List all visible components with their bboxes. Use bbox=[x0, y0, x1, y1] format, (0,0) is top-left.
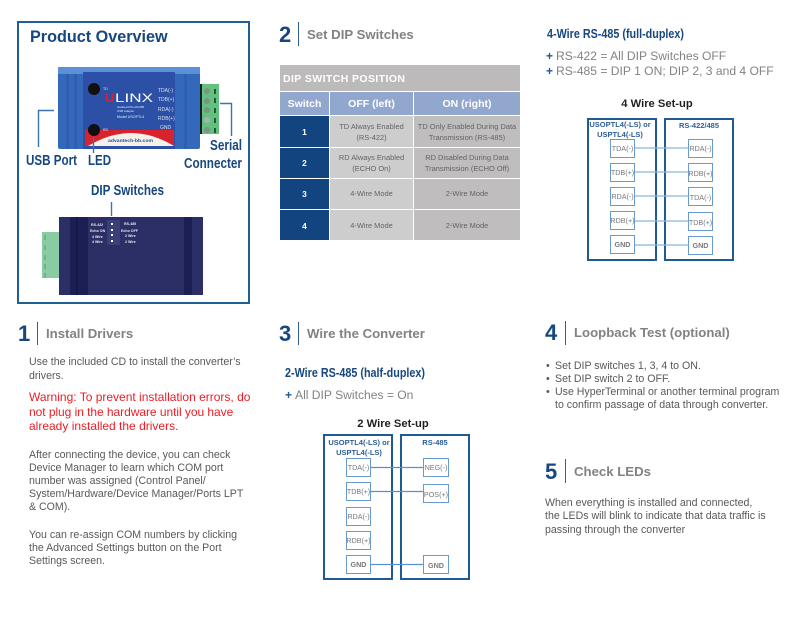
heading: loopback test: Loopback Test (optional) bbox=[574, 325, 730, 340]
table: dip switch position: 3 bbox=[302, 189, 307, 199]
heading: product overview: Product Overview bbox=[30, 28, 168, 46]
diagram: 4 wire set-up: USPTL4(-LS) bbox=[597, 130, 643, 139]
table: dip switch position: 2-Wire Mode bbox=[446, 221, 488, 230]
step number 5: 5 bbox=[545, 459, 557, 484]
section 3: wire the converter bbox=[279, 321, 469, 579]
callout: dip switches bbox=[91, 183, 164, 216]
list: loopback steps: • bbox=[546, 360, 550, 372]
image: converter bottom view: RS-422 bbox=[91, 223, 103, 227]
table: dip switch position: 1 bbox=[302, 127, 307, 137]
image: converter top view: RDB(+) bbox=[158, 116, 175, 122]
heading: check leds: Check LEDs bbox=[574, 464, 651, 479]
list: loopback steps: • bbox=[546, 386, 550, 398]
table: dip switch position: 2 bbox=[302, 158, 307, 168]
image: converter bottom view: RS-485 bbox=[124, 222, 136, 226]
section 4: loopback test bbox=[545, 320, 779, 411]
table: dip switch position: (ECHO On) bbox=[352, 164, 391, 173]
callout: usb port bbox=[26, 110, 77, 169]
image: converter bottom view: Echo OFF bbox=[121, 229, 139, 233]
table: dip switch position: DIP SWITCH POSITION bbox=[283, 73, 405, 85]
table: dip switch position: 4-Wire Mode bbox=[350, 221, 393, 230]
image: converter top view: RDA(-) bbox=[158, 107, 174, 113]
image: converter top view: GND bbox=[160, 125, 172, 131]
diagram: 4 wire set-up: RDB(+) bbox=[688, 169, 713, 178]
image: converter top view: USB Adapter bbox=[117, 109, 134, 113]
diagram: 4 wire set-up: RS-422/485 bbox=[679, 121, 719, 130]
diagram: 4 wire set-up: TDB(+) bbox=[611, 168, 634, 177]
diagram: 4 wire set-up: RDA(-) bbox=[689, 144, 712, 153]
diagram: 2 wire set-up: TDB(+) bbox=[347, 487, 370, 496]
callout: led: LED bbox=[88, 153, 111, 169]
image: converter top view: RD bbox=[103, 128, 109, 132]
table: dip switch position: RD Disabled During Data bbox=[425, 153, 510, 162]
section 5: check leds bbox=[545, 459, 766, 536]
text: led description: the LEDs will blink to indicate that data traffic is bbox=[545, 510, 766, 522]
heading: wire the converter: Wire the Converter bbox=[307, 326, 425, 341]
list: loopback steps: to confirm passage of data through converter. bbox=[555, 399, 768, 411]
diagram: 2 wire set-up: USOPTL4(-LS) or bbox=[328, 438, 390, 447]
heading: 4-wire rs-485: 4-Wire RS-485 (full-duplex) bbox=[547, 26, 684, 41]
diagram: 2 wire set-up: TDA(-) bbox=[348, 463, 369, 472]
diagram: 4 wire set-up: USOPTL4(-LS) or bbox=[589, 120, 651, 129]
image: converter top view bbox=[58, 67, 219, 149]
diagram: 2 wire set-up: RS-485 bbox=[422, 438, 448, 447]
section: 4-wire rs-485 bbox=[546, 26, 774, 260]
diagram: 4 wire set-up: TDA(-) bbox=[612, 144, 633, 153]
table: dip switch position: ON (right) bbox=[442, 98, 492, 110]
table: dip switch position: 2-Wire Mode bbox=[446, 189, 488, 198]
text: rs-485 note: RS-485 = DIP 1 ON; DIP 2, 3 and 4 OFF bbox=[556, 64, 774, 78]
text: all dip switches on: All DIP Switches = On bbox=[295, 388, 413, 402]
diagram: 2 wire set-up bbox=[324, 418, 469, 579]
list: loopback steps: Set DIP switches 1, 3, 4 to ON. bbox=[555, 360, 701, 372]
image: converter bottom view: 4 Wire bbox=[92, 240, 103, 244]
text: device manager: Device Manager to learn which COM port bbox=[29, 462, 223, 474]
image: converter top view: TD bbox=[103, 87, 108, 91]
panel: product overview bbox=[18, 22, 249, 303]
table: dip switch position: TD Only Enabled During Data bbox=[418, 122, 517, 131]
diagram: 4 wire set-up: RDA(-) bbox=[611, 192, 634, 201]
text: re-assign: You can re-assign COM numbers by clicking bbox=[29, 529, 237, 541]
list: loopback steps: Use HyperTerminal or another terminal program bbox=[555, 386, 779, 398]
text: led description: When everything is installed and connected, bbox=[545, 497, 752, 509]
table: dip switch position: Transmission (RS-485) bbox=[429, 133, 506, 142]
image: converter bottom view: 2 Wire bbox=[125, 240, 136, 244]
step number 4: 4 bbox=[545, 320, 558, 345]
image: converter bottom view bbox=[42, 217, 203, 295]
text: warning: Warning: To prevent installation errors, do bbox=[29, 390, 251, 404]
table: dip switch position: RD Always Enabled bbox=[339, 153, 404, 162]
image: converter top view: advantech-bb.com bbox=[108, 138, 153, 144]
diagram: 2 wire set-up: 2 Wire Set-up bbox=[357, 418, 429, 430]
diagram: 4 wire set-up: GND bbox=[615, 240, 630, 249]
diagram: 2 wire set-up: USPTL4(-LS) bbox=[336, 448, 382, 457]
diagram: 2 wire set-up: RDB(+) bbox=[346, 536, 371, 545]
callout: dip switches: DIP Switches bbox=[91, 183, 164, 199]
image: converter top view: LINX bbox=[115, 91, 153, 105]
diagram: 4 wire set-up: TDB(+) bbox=[689, 218, 712, 227]
table: dip switch position: OFF (left) bbox=[348, 98, 395, 110]
heading: set dip switches: Set DIP Switches bbox=[307, 27, 414, 42]
text: intro: Use the included CD to install the converter’s bbox=[29, 356, 241, 368]
text: rs-422 note: + bbox=[546, 49, 553, 63]
text: device manager: & COM). bbox=[29, 501, 70, 513]
diagram: 2 wire set-up: POS(+) bbox=[424, 490, 448, 499]
text: warning: not plug in the hardware until you have bbox=[29, 405, 234, 419]
text: rs-422 note: RS-422 = All DIP Switches OFF bbox=[556, 49, 726, 63]
diagram: 2 wire set-up: GND bbox=[351, 560, 366, 569]
list: loopback steps: • bbox=[546, 373, 550, 385]
text: device manager: System/Hardware/Device Manager/Ports LPT bbox=[29, 488, 244, 500]
diagram: 4 wire set-up: 4 Wire Set-up bbox=[621, 98, 693, 110]
text: rs-485 note: + bbox=[546, 64, 553, 78]
image: converter bottom view: Echo ON bbox=[90, 229, 106, 233]
image: converter top view: Isolated RS-x22/485 bbox=[117, 105, 145, 109]
text: device manager: After connecting the device, you can check bbox=[29, 449, 231, 461]
step number 3: 3 bbox=[279, 321, 291, 346]
diagram: 2 wire set-up: GND bbox=[428, 561, 444, 570]
image: converter top view: U bbox=[105, 90, 114, 105]
table: dip switch position: (RS-422) bbox=[356, 133, 387, 142]
table: dip switch position: 4-Wire Mode bbox=[350, 189, 393, 198]
section 2: set dip switches bbox=[279, 22, 520, 240]
diagram: 4 wire set-up bbox=[588, 98, 733, 260]
text: intro: drivers. bbox=[29, 370, 64, 382]
diagram: 4 wire set-up: RDB(+) bbox=[610, 216, 635, 225]
heading: install drivers: Install Drivers bbox=[46, 326, 133, 341]
step number 1: 1 bbox=[18, 321, 30, 346]
text: all dip switches on: + bbox=[285, 388, 292, 402]
callout: led bbox=[88, 137, 111, 169]
callout: serial connecter: Serial bbox=[210, 138, 242, 154]
diagram: 2 wire set-up: RDA(-) bbox=[347, 512, 370, 521]
heading: 2-wire rs-485: 2-Wire RS-485 (half-duplex) bbox=[285, 365, 425, 380]
text: warning: already installed the drivers. bbox=[29, 419, 178, 433]
diagram: 4 wire set-up: TDA(-) bbox=[690, 193, 711, 202]
image: converter bottom view: 4 Wire bbox=[92, 235, 103, 239]
table: dip switch position: 4 bbox=[302, 221, 307, 231]
list: loopback steps: Set DIP switch 2 to OFF. bbox=[555, 373, 670, 385]
image: converter top view: TDA(-) bbox=[158, 88, 173, 94]
image: converter top view: Model USOPTL4 bbox=[117, 115, 144, 119]
diagram: 2 wire set-up: NEG(-) bbox=[425, 463, 447, 472]
text: re-assign: the Advanced Settings button on the Port bbox=[29, 542, 222, 554]
image: converter top view: TDB(+) bbox=[158, 97, 175, 103]
step number 2: 2 bbox=[279, 22, 291, 47]
table: dip switch position bbox=[280, 65, 520, 240]
diagram: 4 wire set-up: GND bbox=[693, 241, 708, 250]
table: dip switch position: Switch bbox=[288, 98, 321, 110]
table: dip switch position: Transmission (ECHO Off) bbox=[425, 164, 510, 173]
section 1: install drivers bbox=[18, 321, 251, 567]
table: dip switch position: TD Always Enabled bbox=[339, 122, 404, 131]
text: re-assign: Settings screen. bbox=[29, 555, 105, 567]
callout: serial connecter: Connecter bbox=[184, 156, 242, 172]
text: led description: passing through the converter bbox=[545, 524, 686, 536]
callout: serial connecter bbox=[184, 104, 242, 172]
text: device manager: number was assigned (Control Panel/ bbox=[29, 475, 206, 487]
image: converter bottom view: 2 Wire bbox=[125, 234, 136, 238]
callout: usb port: USB Port bbox=[26, 153, 77, 169]
